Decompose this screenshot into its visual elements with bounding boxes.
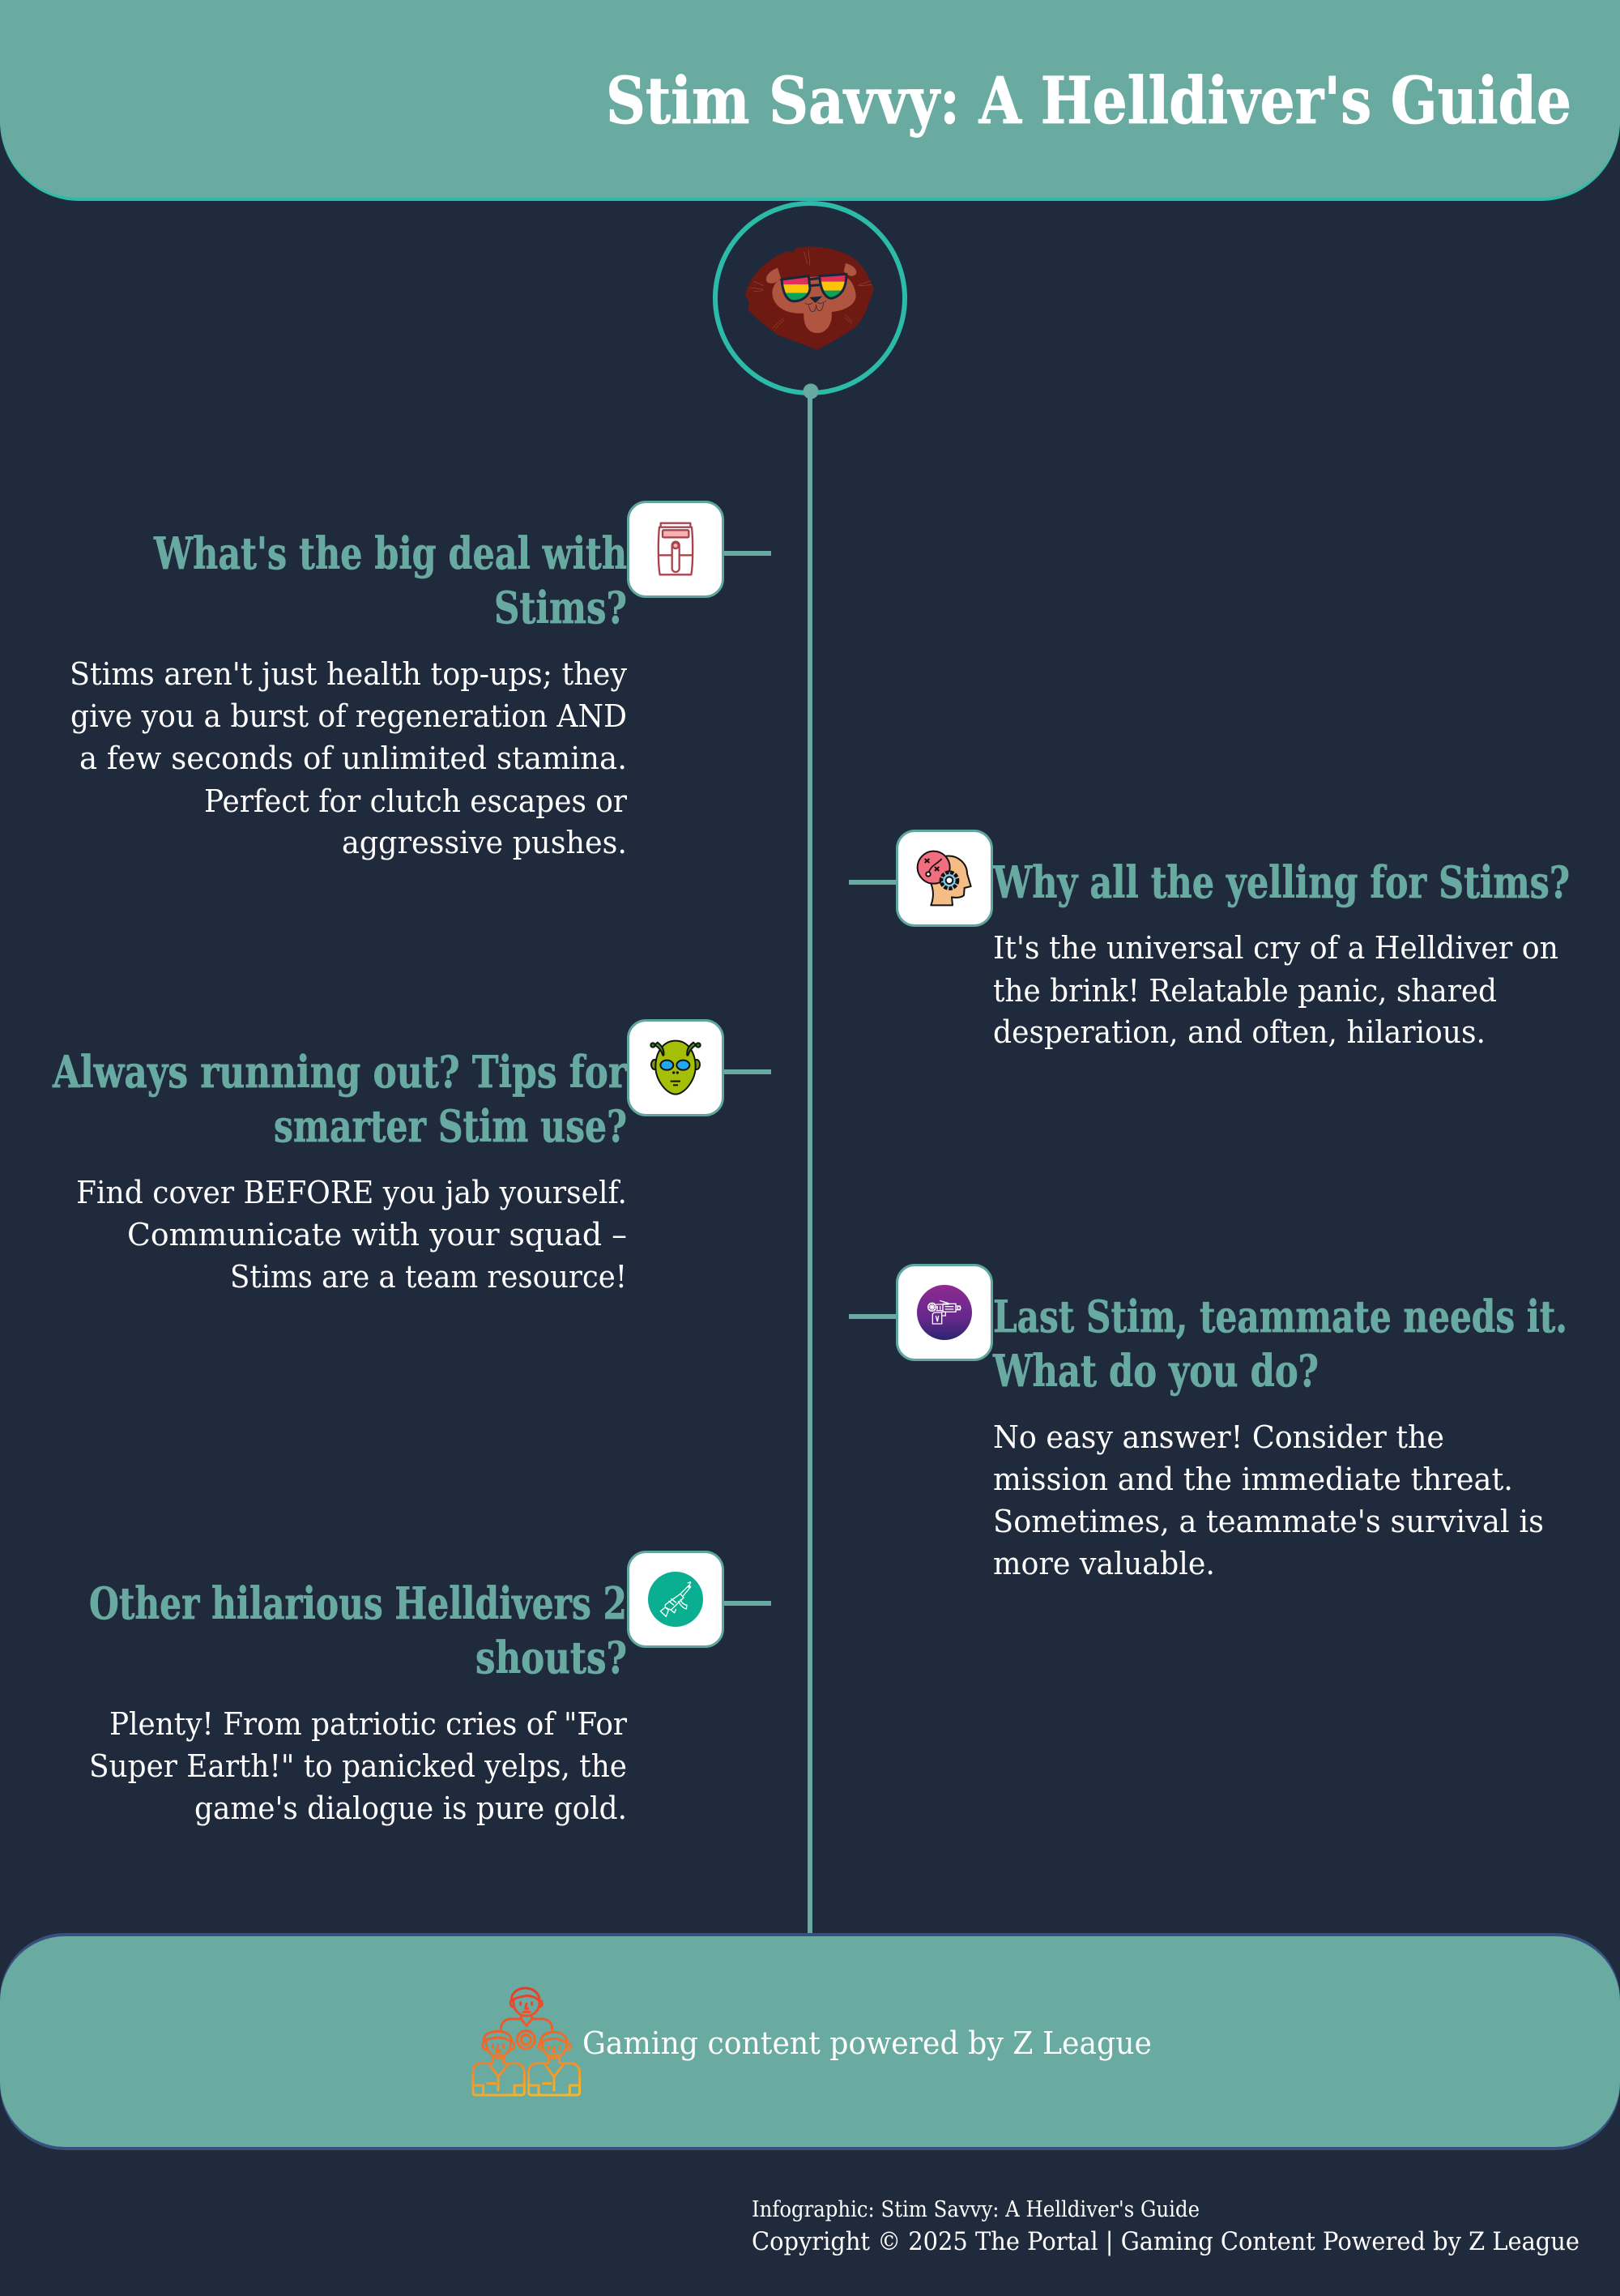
- item 1: what's the big deal: [70, 502, 771, 860]
- connector: [721, 1069, 771, 1074]
- body text: give you a burst of regeneration AND: [70, 698, 627, 734]
- icon box: assault rifle: [629, 1552, 723, 1646]
- connector: [849, 880, 897, 885]
- body text: [70, 656, 628, 860]
- icon: team with gear: [473, 1988, 580, 2095]
- connector: [849, 1314, 897, 1319]
- item 3: always running out: [52, 1021, 771, 1295]
- body text: a few seconds of unlimited stamina.: [79, 740, 627, 776]
- heading: [89, 1577, 627, 1684]
- heading: [992, 1291, 1567, 1397]
- body text: Stims aren't just health top-ups; they: [70, 656, 628, 692]
- body text: aggressive pushes.: [342, 825, 627, 860]
- connector: [721, 551, 771, 556]
- body text: more valuable.: [993, 1546, 1215, 1581]
- icon box: air fryer stim pack: [629, 502, 723, 596]
- body text: Sometimes, a teammate's survival is: [993, 1504, 1544, 1539]
- body text: [993, 1419, 1544, 1581]
- icon box: blaster pistol: [897, 1265, 991, 1359]
- credit lines: Copyright © 2025 The Portal | Gaming Content Powered by Z League: [752, 2227, 1580, 2256]
- body text: game's dialogue is pure gold.: [194, 1790, 627, 1826]
- heading: shouts?: [475, 1632, 627, 1684]
- item 4: last stim: [849, 1265, 1567, 1581]
- body text: Plenty! From patriotic cries of "For: [109, 1706, 628, 1742]
- credit lines: [752, 2197, 1580, 2256]
- body text: [89, 1706, 628, 1826]
- heading: Other hilarious Helldivers 2: [89, 1577, 627, 1629]
- icon: lion with sunglasses: [745, 246, 873, 350]
- header banner: [0, 0, 1620, 201]
- body text: Perfect for clutch escapes or: [204, 783, 628, 819]
- body text: Find cover BEFORE you jab yourself.: [76, 1175, 627, 1210]
- body text: Stims are a team resource!: [230, 1259, 627, 1295]
- logo circle with lion: [715, 203, 905, 399]
- body text: [993, 930, 1558, 1050]
- item 2: why all the yelling: [849, 831, 1570, 1050]
- body text: the brink! Relatable panic, shared: [993, 973, 1497, 1009]
- timeline line: [808, 391, 812, 1935]
- heading: Always running out? Tips for: [52, 1046, 627, 1098]
- body text: mission and the immediate threat.: [993, 1462, 1513, 1497]
- footer banner text: Gaming content powered by Z League: [582, 2025, 1152, 2061]
- connector: [721, 1601, 771, 1606]
- icon box: head with strategy and gear: [897, 831, 991, 925]
- body text: Communicate with your squad –: [127, 1217, 627, 1253]
- heading: smarter Stim use?: [274, 1100, 627, 1152]
- footer banner: [0, 1933, 1620, 2150]
- item 5: other hilarious shouts: [89, 1552, 771, 1826]
- body text: [76, 1175, 627, 1295]
- body text: Super Earth!" to panicked yelps, the: [89, 1748, 627, 1784]
- body text: It's the universal cry of a Helldiver on: [993, 930, 1558, 966]
- heading: What's the big deal with: [153, 527, 627, 579]
- credit lines: Infographic: Stim Savvy: A Helldiver's Guide: [752, 2197, 1200, 2222]
- heading: Stims?: [494, 582, 627, 634]
- body text: No easy answer! Consider the: [993, 1419, 1444, 1455]
- body text: desperation, and often, hilarious.: [993, 1014, 1486, 1050]
- heading: [153, 527, 627, 634]
- heading: What do you do?: [992, 1345, 1319, 1397]
- heading: [52, 1046, 627, 1152]
- icon box: alien face: [629, 1021, 723, 1115]
